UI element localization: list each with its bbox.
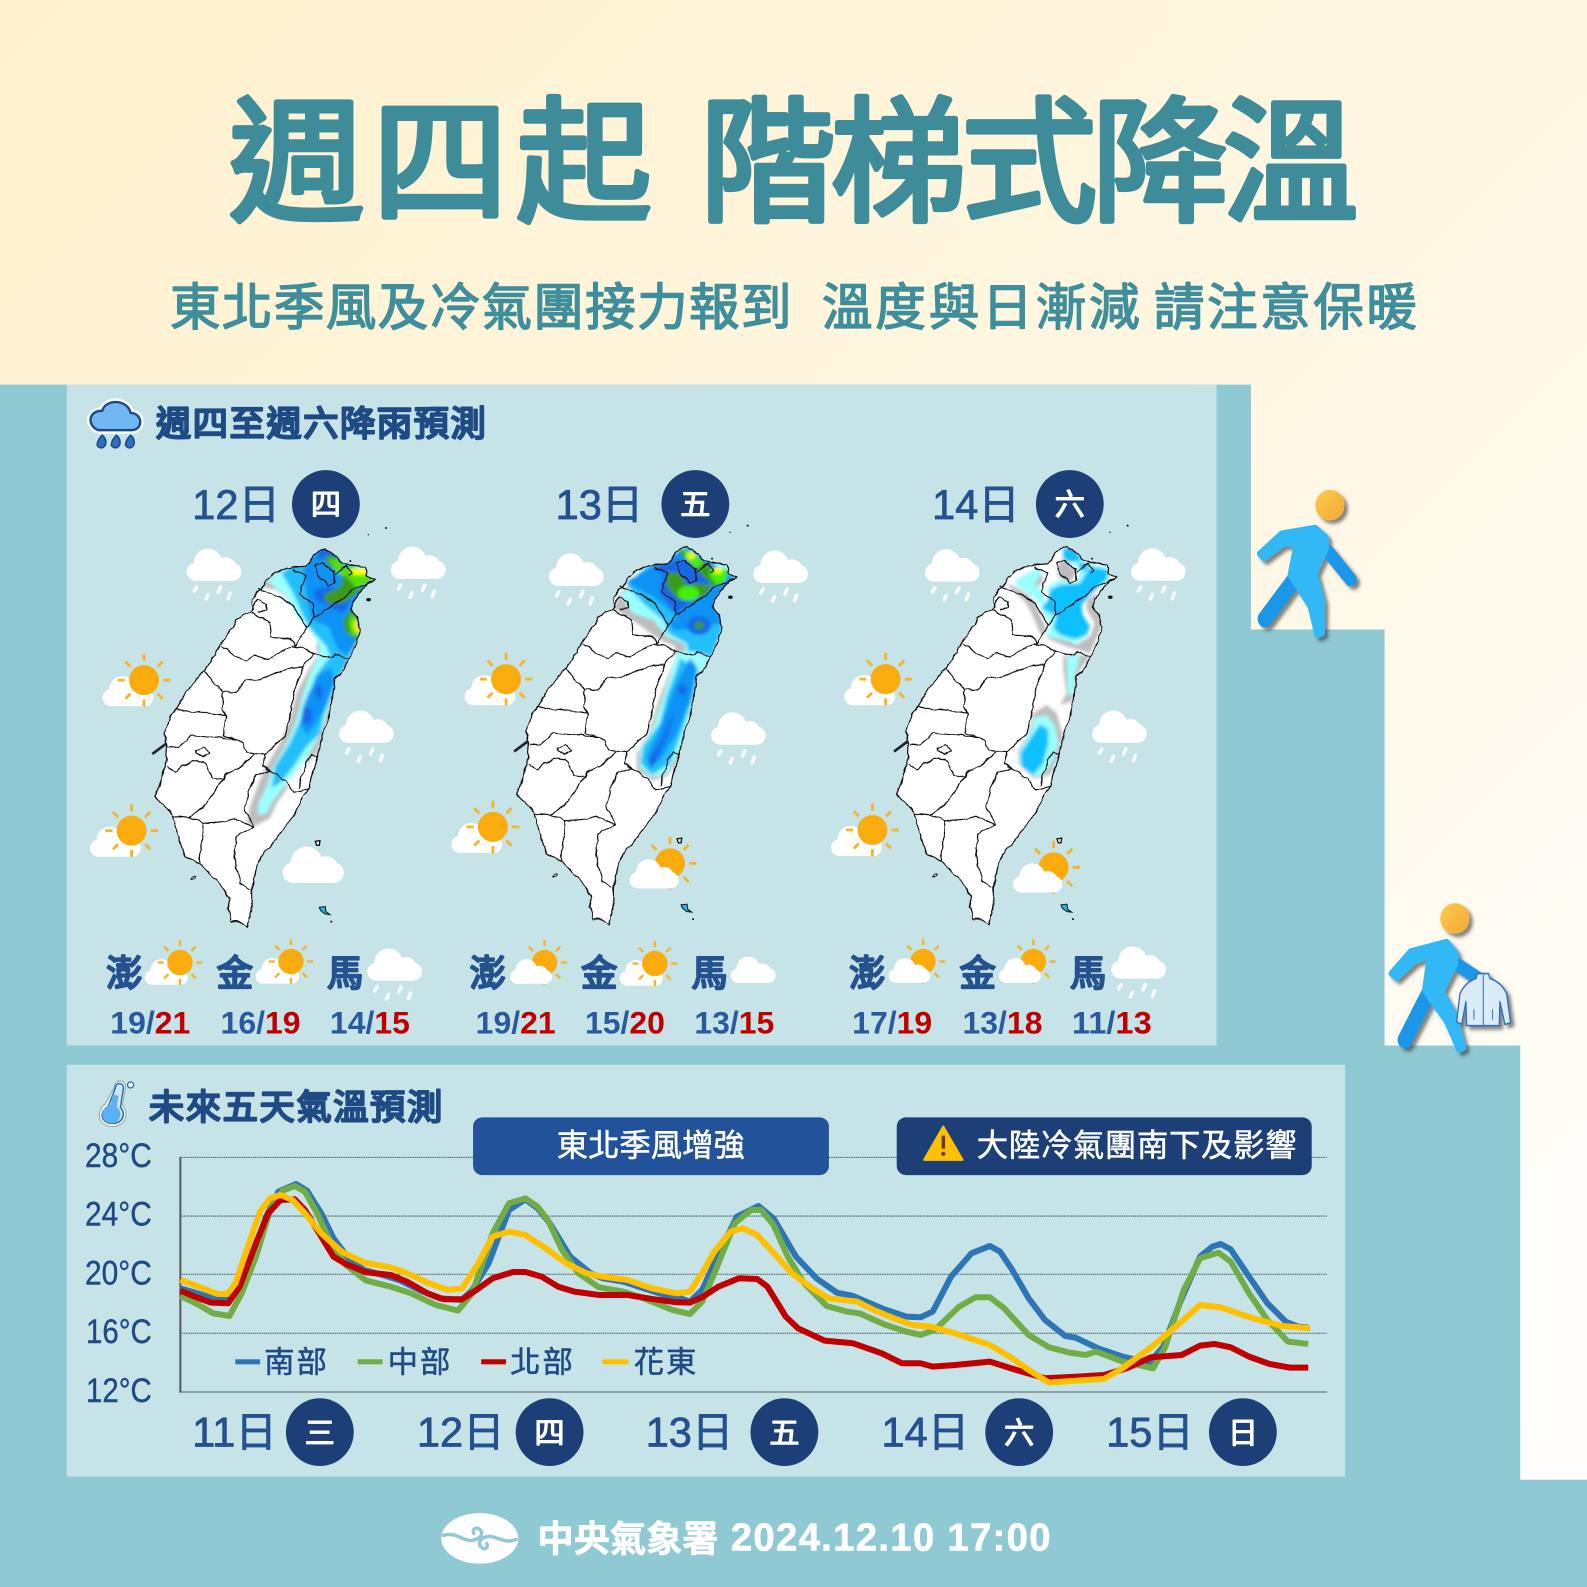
map: Taiwan rain 12日 <box>152 527 387 927</box>
icon: sun and cloud <box>103 654 170 706</box>
weekday badge: 五 <box>661 470 729 538</box>
subtitle: 溫度與日漸減 <box>822 279 1140 336</box>
chart: five day temperature <box>85 1137 1327 1410</box>
outlying islands: 澎: 澎 <box>849 953 886 994</box>
icon: sun and cloud <box>90 804 158 857</box>
title: 階梯式降溫 <box>700 88 1358 240</box>
outlying islands: 馬 <box>691 953 776 1040</box>
heading: temperature: 未來五天氣溫預測 <box>149 1087 442 1127</box>
heading: rainfall: 週四至週六降雨預測 <box>156 404 486 444</box>
outlying islands: 澎: 19/21 <box>110 1005 190 1040</box>
agency and timestamp: 2024.12.10 17:00 <box>731 1517 1051 1560</box>
weekday badge: 五: 五 <box>680 489 711 522</box>
outlying islands: 馬: 11/13 <box>1072 1005 1152 1040</box>
y axis labels: 20°C <box>85 1254 152 1292</box>
icon: warning triangle <box>924 1126 963 1160</box>
agency and timestamp <box>537 1517 1051 1560</box>
day axis: 14日 六 <box>882 1398 1053 1466</box>
subtitle <box>170 279 1417 336</box>
icon: sun and cloud <box>630 837 696 890</box>
icon: rain cloud <box>549 553 604 604</box>
callout: cold air mass: 大陸冷氣團南下及影響 <box>977 1128 1297 1163</box>
outlying islands: 澎 <box>849 939 945 1040</box>
icon: sun and cloud <box>844 653 912 705</box>
outlying islands: 金 <box>217 939 313 1040</box>
icon: cloud <box>283 847 344 883</box>
day axis: 13日 五: 13日 <box>646 1408 733 1455</box>
subtitle: 東北季風及冷氣團接力報到 <box>170 279 791 336</box>
y axis labels: 16°C <box>86 1313 152 1351</box>
y axis labels: 12°C <box>86 1372 152 1410</box>
icon: rain cloud <box>339 711 394 761</box>
day axis: 12日 四: 12日 <box>417 1408 505 1455</box>
panel: rainfall forecast <box>67 385 1217 1046</box>
footer <box>441 1513 1051 1564</box>
title <box>229 88 1358 240</box>
day axis: 15日 日: 日 <box>1228 1417 1258 1450</box>
icon: rain cloud <box>711 712 766 763</box>
icon: thermometer <box>99 1081 134 1126</box>
y axis labels: 24°C <box>85 1196 152 1234</box>
callout: northeast monsoon <box>473 1117 829 1175</box>
outlying islands: 馬: 14/15 <box>330 1005 410 1040</box>
panel: temperature forecast <box>67 1065 1345 1477</box>
icon: rain cloud header <box>91 402 140 448</box>
day axis: 11日 三: 三 <box>305 1417 335 1450</box>
outlying islands: 金: 金 <box>581 953 617 994</box>
icon: walking person top step <box>1260 490 1351 635</box>
outlying islands: 馬 <box>327 948 422 1040</box>
outlying islands: 金: 金 <box>217 953 253 994</box>
date: 14日: 14日 <box>932 481 1020 528</box>
day axis: 13日 五: 五 <box>769 1417 800 1450</box>
outlying islands: 馬: 馬 <box>691 953 728 994</box>
weekday badge: 六: 六 <box>1055 488 1085 522</box>
subtitle: 請注意保暖 <box>1154 279 1417 336</box>
outlying islands: 澎: 澎 <box>106 953 142 994</box>
outlying islands: 澎 <box>106 940 202 1040</box>
callout: northeast monsoon: 東北季風增強 <box>557 1128 745 1163</box>
legend: 北部 <box>510 1345 573 1379</box>
title: 週四起 <box>229 88 652 240</box>
legend: 南部 <box>264 1345 327 1379</box>
legend <box>235 1345 696 1379</box>
outlying islands: 澎: 17/19 <box>852 1005 932 1040</box>
day axis: 15日 日: 15日 <box>1106 1408 1194 1455</box>
outlying islands: 金 <box>959 939 1056 1040</box>
day axis: 11日 三 <box>192 1398 354 1466</box>
icon: rain cloud <box>925 549 980 600</box>
day axis: 12日 四: 四 <box>534 1417 565 1450</box>
day axis: 14日 六: 六 <box>1004 1416 1034 1450</box>
map column: 12日 <box>90 470 446 1040</box>
day axis: 15日 日 <box>1106 1398 1277 1466</box>
weekday badge: 六 <box>1036 470 1104 538</box>
outlying islands: 澎: 澎 <box>470 953 506 994</box>
map column: 14日 <box>831 470 1186 1040</box>
legend: 花東 <box>634 1345 696 1379</box>
outlying islands: 馬: 馬 <box>1070 953 1106 994</box>
outlying islands: 金 <box>581 941 677 1040</box>
outlying islands: 金: 金 <box>959 953 996 994</box>
date: 13日: 13日 <box>556 481 643 528</box>
jacket <box>1457 974 1511 1026</box>
icon: sun and cloud <box>451 801 519 853</box>
map column: 13日 <box>451 470 808 1040</box>
map: Taiwan rain 13日 <box>514 525 749 924</box>
icon: walking person with jacket <box>1392 903 1511 1049</box>
icon: rain cloud <box>1092 711 1147 761</box>
outlying islands: 馬: 13/15 <box>694 1005 774 1040</box>
icon: sun and cloud <box>465 653 532 705</box>
date: 12日: 12日 <box>192 481 280 528</box>
agency and timestamp: 中央氣象署 <box>537 1519 719 1560</box>
outlying islands: 澎: 19/21 <box>476 1005 556 1040</box>
stepped teal staircase <box>0 385 1587 1587</box>
legend: 中部 <box>388 1345 450 1379</box>
outlying islands: 金: 15/20 <box>585 1005 665 1040</box>
map: Taiwan rain 14日 <box>894 525 1129 924</box>
outlying islands: 澎 <box>470 940 567 1040</box>
outlying islands: 馬: 馬 <box>327 953 363 994</box>
icon: rain cloud <box>391 547 446 597</box>
outlying islands: 金: 13/18 <box>963 1005 1042 1040</box>
day axis: 13日 五 <box>646 1398 818 1466</box>
icon: sun and cloud <box>1013 841 1080 894</box>
y axis labels: 28°C <box>85 1137 152 1175</box>
y axis labels <box>85 1137 152 1410</box>
outlying islands: 金: 16/19 <box>221 1005 301 1040</box>
icon: rain cloud <box>187 549 241 599</box>
icon: rain cloud <box>753 551 808 601</box>
icon: rain cloud <box>1131 548 1186 599</box>
weekday badge: 四: 四 <box>311 489 341 522</box>
day axis: 12日 四 <box>417 1398 583 1466</box>
weekday badge: 四 <box>292 470 360 538</box>
day axis: 11日 三: 11日 <box>192 1408 277 1455</box>
day axis: 14日 六: 14日 <box>882 1408 969 1455</box>
logo: CWA <box>441 1513 518 1564</box>
callout: cold air mass <box>897 1117 1312 1175</box>
icon: sun and cloud <box>831 804 899 856</box>
temperature lines <box>180 1184 1310 1383</box>
outlying islands: 馬 <box>1070 946 1166 1040</box>
